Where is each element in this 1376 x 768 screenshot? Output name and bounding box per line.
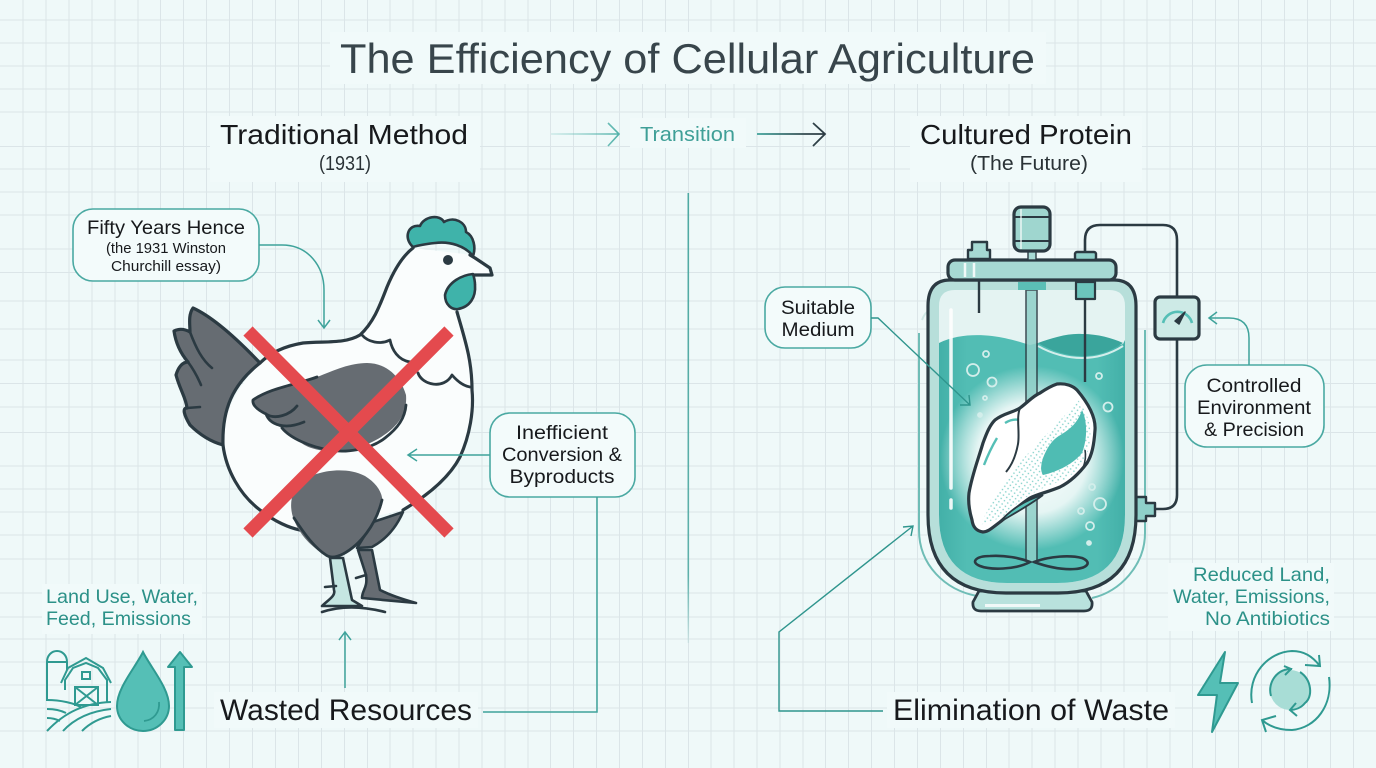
label: wasted resources: Wasted Resources bbox=[220, 694, 472, 727]
cultured meat bbox=[969, 384, 1095, 532]
icon: bioreactor bbox=[919, 207, 1199, 611]
label: reduced land: Water, Emissions, bbox=[1173, 586, 1330, 608]
center block bbox=[1018, 282, 1046, 290]
head and beak bbox=[470, 255, 492, 275]
thigh bbox=[291, 470, 382, 557]
left port bbox=[968, 242, 990, 259]
icon: water drop bbox=[117, 652, 169, 731]
icon: chicken crossed out bbox=[174, 217, 492, 612]
outer jacket bbox=[919, 330, 1145, 598]
probe right bbox=[1084, 299, 1086, 382]
label: elimination of waste: Elimination of Waste bbox=[893, 694, 1169, 727]
callout: inefficient conversion bbox=[490, 413, 635, 497]
icon: farm bbox=[47, 651, 111, 731]
arrow: wasted resources to chicken bbox=[339, 632, 351, 688]
red cross bbox=[248, 331, 449, 533]
neck ruffles bbox=[362, 335, 470, 387]
icon: up arrow bbox=[168, 652, 192, 730]
transition label with arrows bbox=[551, 118, 825, 148]
bubbles bbox=[967, 351, 1112, 545]
probe left bbox=[978, 280, 980, 313]
callout: controlled environment bbox=[1185, 365, 1324, 447]
callout: controlled environment: Environment bbox=[1197, 397, 1312, 419]
label: land use bbox=[42, 584, 202, 634]
callout: inefficient conversion: Conversion & bbox=[502, 444, 622, 466]
label: land use: Land Use, Water, bbox=[46, 586, 198, 608]
motor bbox=[1014, 207, 1050, 251]
arrow: suitable medium to liquid bbox=[871, 318, 970, 405]
callout: fifty years hence bbox=[73, 209, 259, 281]
highlight bbox=[949, 310, 953, 508]
callout: fifty years hence: Fifty Years Hence bbox=[87, 217, 245, 239]
under tail bbox=[357, 512, 403, 548]
icon: recycling cycle bbox=[1251, 651, 1330, 732]
callout: suitable medium: Suitable bbox=[781, 297, 855, 319]
transition label with arrows: Transition bbox=[640, 123, 735, 146]
wire bbox=[1085, 225, 1177, 509]
shaft bbox=[1026, 290, 1037, 562]
label: reduced land: Reduced Land, bbox=[1193, 564, 1330, 586]
heading: cultured protein bbox=[910, 116, 1142, 182]
gauge bbox=[1155, 297, 1199, 339]
vessel wall bbox=[928, 280, 1136, 593]
arrow: fifty years to chicken bbox=[259, 245, 330, 328]
label: reduced land bbox=[1168, 563, 1334, 631]
right port bbox=[1075, 252, 1096, 260]
probe block bbox=[1076, 282, 1095, 299]
lid bbox=[948, 260, 1116, 280]
wing bbox=[253, 363, 406, 452]
liquid bbox=[939, 334, 1125, 590]
arrow: inefficient to chicken bbox=[408, 449, 490, 461]
callout: suitable medium bbox=[765, 287, 871, 348]
heading: cultured protein: Cultured Protein bbox=[920, 119, 1132, 150]
heading: traditional method bbox=[210, 116, 480, 182]
chicken body bbox=[223, 248, 492, 532]
motor stem bbox=[1028, 251, 1036, 260]
callout: fifty years hence: (the 1931 Winston bbox=[106, 240, 226, 257]
title: The Efficiency of Cellular Agriculture bbox=[340, 35, 1035, 82]
connector: elimination of waste to reactor bbox=[779, 526, 913, 711]
connector: inefficient to wasted resources bbox=[483, 497, 597, 712]
base bbox=[973, 591, 1092, 611]
label: reduced land: No Antibiotics bbox=[1205, 608, 1330, 630]
side port bbox=[1136, 497, 1155, 521]
front leg bbox=[322, 558, 362, 606]
heading: cultured protein: (The Future) bbox=[970, 153, 1088, 175]
callout: inefficient conversion: Byproducts bbox=[510, 466, 615, 488]
heading: traditional method: (1931) bbox=[319, 153, 371, 175]
arrow: controlled environment to gauge bbox=[1209, 312, 1249, 365]
label: land use: Feed, Emissions bbox=[46, 608, 191, 630]
callout: inefficient conversion: Inefficient bbox=[516, 422, 609, 444]
callout: suitable medium: Medium bbox=[782, 319, 854, 341]
center divider bbox=[688, 193, 689, 643]
back leg bbox=[358, 550, 416, 603]
tail bbox=[174, 308, 260, 445]
callout: controlled environment: Controlled bbox=[1206, 375, 1302, 397]
callout: fifty years hence: Churchill essay) bbox=[111, 258, 221, 275]
impeller bbox=[975, 556, 1088, 569]
comb bbox=[408, 217, 474, 256]
heading: traditional method: Traditional Method bbox=[220, 119, 468, 150]
wattle bbox=[445, 274, 475, 309]
vessel interior bbox=[939, 290, 1125, 583]
callout: controlled environment: & Precision bbox=[1204, 419, 1304, 441]
icon: lightning bolt bbox=[1198, 652, 1238, 732]
